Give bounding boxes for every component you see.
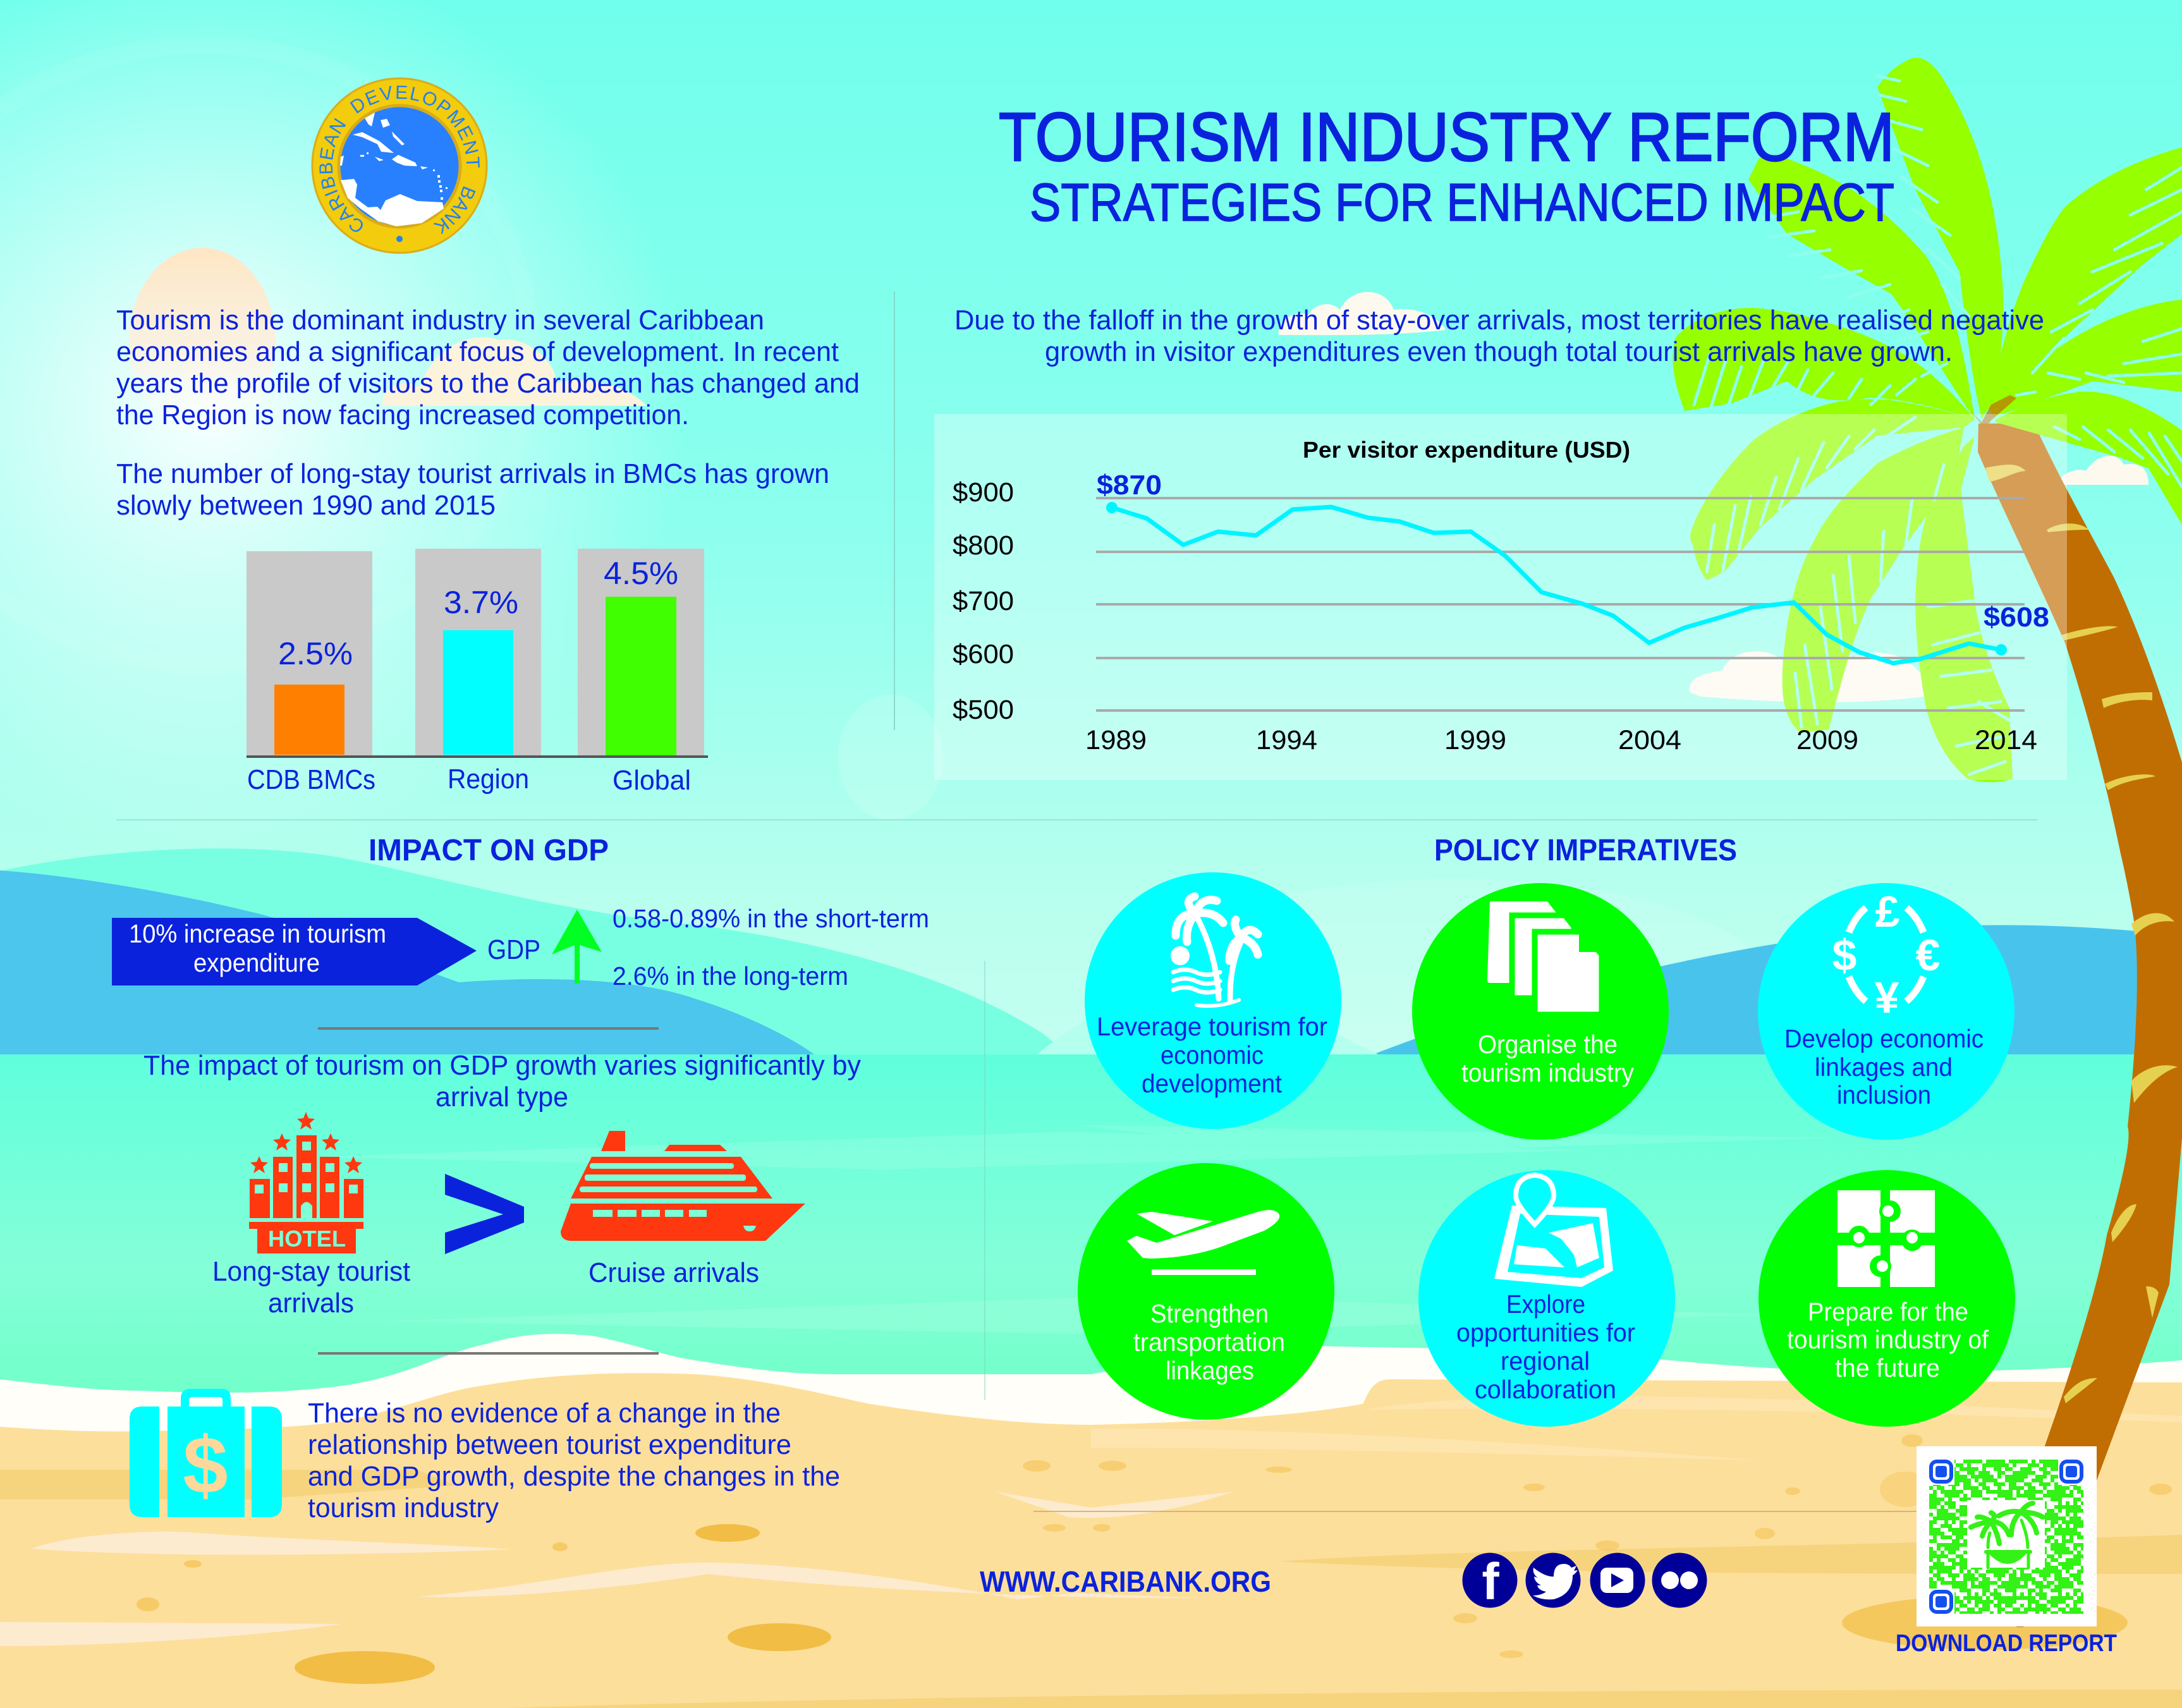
text block: GDP effects [613, 904, 929, 991]
QR palm logo [1971, 1503, 2043, 1568]
line chart: per visitor expenditure: 1989 [1085, 725, 1147, 755]
policy: regional collaboration: opportunities for [1456, 1318, 1635, 1347]
line chart: per visitor expenditure: 1994 [1256, 725, 1317, 755]
label: cruise arrivals: Cruise arrivals [588, 1257, 759, 1288]
text block: arrival type: arrival type [436, 1082, 568, 1113]
background: sky [0, 0, 2182, 1094]
line chart: per visitor expenditure: 2004 [1618, 725, 1681, 755]
text block: intro: years the profile of visitors to the Caribbean has changed and [116, 368, 860, 399]
text block: visitor expenditure note [954, 305, 2044, 367]
text block: intro: The number of long-stay tourist arrivals in BMCs has grown [116, 458, 829, 489]
label: long-stay arrivals [212, 1256, 410, 1319]
text block: intro: slowly between 1990 and 2015 [116, 490, 496, 521]
bar: Global [606, 597, 676, 756]
policy: transportation: Strengthen [1150, 1299, 1269, 1328]
icon: twitter [1526, 1552, 1580, 1608]
icon: currencies: $ [1832, 930, 1856, 980]
bar: Region [443, 630, 513, 755]
bar chart: long-stay arrivals growth: 3.7% [444, 585, 518, 620]
line chart: per visitor expenditure: $800 [953, 530, 1014, 561]
palm trunk [1978, 424, 2182, 1627]
logo: Caribbean Development Bank: CARIBBEAN [319, 118, 363, 232]
QR code [1917, 1446, 2097, 1626]
line chart: per visitor expenditure [953, 437, 2049, 755]
icon: facebook: f [1482, 1553, 1499, 1611]
panel: per visitor expenditure chart background [934, 414, 2067, 780]
line chart: per visitor expenditure: 2009 [1796, 725, 1858, 755]
arrow: tourism expenditure: expenditure [193, 948, 320, 977]
background: hills [0, 848, 2182, 1054]
title: TOURISM INDUSTRY REFORM [999, 99, 1894, 176]
palm leaf slits [1694, 76, 2182, 774]
policy: regional collaboration: regional [1501, 1346, 1590, 1376]
illustration: palm tree [1673, 58, 2182, 1627]
line chart: per visitor expenditure: $608 [1984, 602, 2049, 633]
label: long-stay arrivals: Long-stay tourist [212, 1256, 410, 1287]
heading: policy imperatives: POLICY IMPERATIVES [1434, 834, 1737, 867]
dividers [116, 291, 2037, 1400]
label: GDP: GDP [487, 934, 540, 965]
text block: visitor expenditure note: Due to the falloff in the growth of stay-over arrivals, most territories have realised negative [954, 305, 2044, 336]
palm leaves [1673, 58, 2182, 782]
line chart: per visitor expenditure: $870 [1097, 470, 1162, 501]
policy: leverage tourism: economic [1161, 1040, 1264, 1070]
icon: plane [1127, 1210, 1279, 1275]
bar: CDB BMCs [274, 685, 344, 755]
policy: economic linkages: linkages and [1815, 1052, 1953, 1082]
text block: intro: the Region is now facing increased competition. [116, 400, 689, 430]
bar chart: long-stay arrivals growth: 2.5% [278, 636, 353, 671]
icon: currencies [1832, 887, 1940, 1022]
logo: Caribbean Development Bank: BANK [433, 186, 475, 235]
icon: palm island [1171, 896, 1258, 1006]
icon: documents [1487, 901, 1602, 1015]
policy: future: Prepare for the [1808, 1297, 1968, 1326]
label: download report: DOWNLOAD REPORT [1896, 1630, 2117, 1657]
line chart: per visitor expenditure: $700 [953, 586, 1014, 616]
title [999, 99, 1894, 232]
clouds [382, 292, 2148, 702]
text block: intro [116, 305, 860, 521]
policy: future [1758, 1170, 2015, 1427]
text block: intro: Tourism is the dominant industry in several Caribbean [116, 305, 764, 336]
bar chart: long-stay arrivals growth: Region [448, 764, 529, 795]
text block: no evidence: and GDP growth, despite the changes in the [308, 1461, 840, 1492]
icon: currencies: ¥ [1875, 973, 1899, 1022]
text block: GDP effects: 0.58-0.89% in the short-term [613, 904, 929, 933]
policy: leverage tourism: development [1142, 1069, 1283, 1098]
website link: WWW.CARIBANK.ORG [980, 1565, 1271, 1598]
policy: organise: Organise the [1478, 1030, 1618, 1059]
text block: arrival type: The impact of tourism on GDP growth varies significantly by [143, 1050, 861, 1081]
line chart: per visitor expenditure: $900 [953, 477, 1014, 508]
policy: leverage tourism: Leverage tourism for [1097, 1012, 1327, 1041]
policy: economic linkages: inclusion [1837, 1080, 1931, 1109]
policy: economic linkages [1758, 883, 2014, 1140]
line chart: per visitor expenditure: 2014 [1975, 725, 2037, 755]
text block: no evidence: tourism industry [308, 1492, 499, 1523]
icon: map and pin [1494, 1175, 1613, 1287]
background: sand [0, 1373, 2182, 1708]
policy: regional collaboration [1418, 1170, 1675, 1427]
text block: no evidence [308, 1398, 840, 1523]
icon: cruise ship [561, 1131, 805, 1241]
policy: economic linkages: Develop economic [1784, 1024, 1984, 1053]
icon: flickr [1652, 1552, 1707, 1608]
background: foam [0, 1334, 2182, 1454]
text block: no evidence: There is no evidence of a change in the [308, 1398, 781, 1429]
icon: suitcase [130, 1389, 282, 1517]
arrow: tourism expenditure [112, 918, 477, 985]
line chart: per visitor expenditure: 1999 [1444, 725, 1506, 755]
icon: youtube [1590, 1552, 1645, 1608]
background: sea [0, 1054, 2182, 1408]
policy: regional collaboration: collaboration [1475, 1375, 1616, 1404]
policy: transportation: linkages [1166, 1356, 1254, 1385]
subtitle: STRATEGIES FOR ENHANCED IMPACT [1030, 173, 1894, 232]
bar chart: long-stay arrivals growth: CDB BMCs [247, 764, 375, 795]
text block: visitor expenditure note: growth in visitor expenditures even though total tourist arrivals have grown. [1045, 336, 1953, 367]
policy: organise [1412, 883, 1669, 1140]
bar chart: long-stay arrivals growth [247, 549, 708, 796]
social icons [1463, 1552, 1707, 1611]
line chart: per visitor expenditure: $600 [953, 639, 1014, 669]
arrow: tourism expenditure: 10% increase in tourism [129, 919, 386, 948]
policy: transportation: transportation [1133, 1327, 1285, 1357]
line chart: per visitor expenditure: $500 [953, 695, 1014, 725]
policy: future: the future [1835, 1353, 1940, 1382]
policy: regional collaboration: Explore [1506, 1290, 1585, 1319]
icon: greater than [445, 1174, 524, 1254]
heading: impact on GDP: IMPACT ON GDP [369, 834, 609, 867]
icon: hotel: HOTEL [268, 1226, 346, 1252]
bar chart: long-stay arrivals growth: 4.5% [604, 556, 678, 591]
icon: currencies: £ [1875, 887, 1900, 936]
palm crown [1971, 395, 2016, 429]
logo: Caribbean Development Bank: DEVELOPMENT [350, 86, 480, 168]
icon: currencies: € [1916, 930, 1940, 980]
line chart: per visitor expenditure: Per visitor expenditure (USD) [1303, 437, 1630, 463]
bar chart: long-stay arrivals growth: Global [613, 765, 691, 796]
sun [129, 248, 276, 435]
label: long-stay arrivals: arrivals [268, 1288, 354, 1319]
logo: Caribbean Development Bank [311, 77, 488, 254]
text block: GDP effects: 2.6% in the long-term [613, 961, 848, 991]
text block: intro: economies and a significant focus of development. In recent [116, 336, 839, 367]
text block: no evidence: relationship between tourist expenditure [308, 1429, 791, 1460]
icon: puzzle [1838, 1190, 1935, 1287]
policy: transportation [1078, 1163, 1334, 1420]
policy: future: tourism industry of [1787, 1325, 1989, 1354]
policy: organise: tourism industry [1461, 1058, 1634, 1087]
text block: arrival type [143, 1050, 861, 1113]
policy: leverage tourism [1085, 872, 1341, 1129]
icon: hotel [249, 1112, 363, 1254]
icon: suitcase: $ [183, 1420, 228, 1511]
icon: up arrow [552, 910, 602, 984]
icon: facebook [1463, 1552, 1517, 1611]
